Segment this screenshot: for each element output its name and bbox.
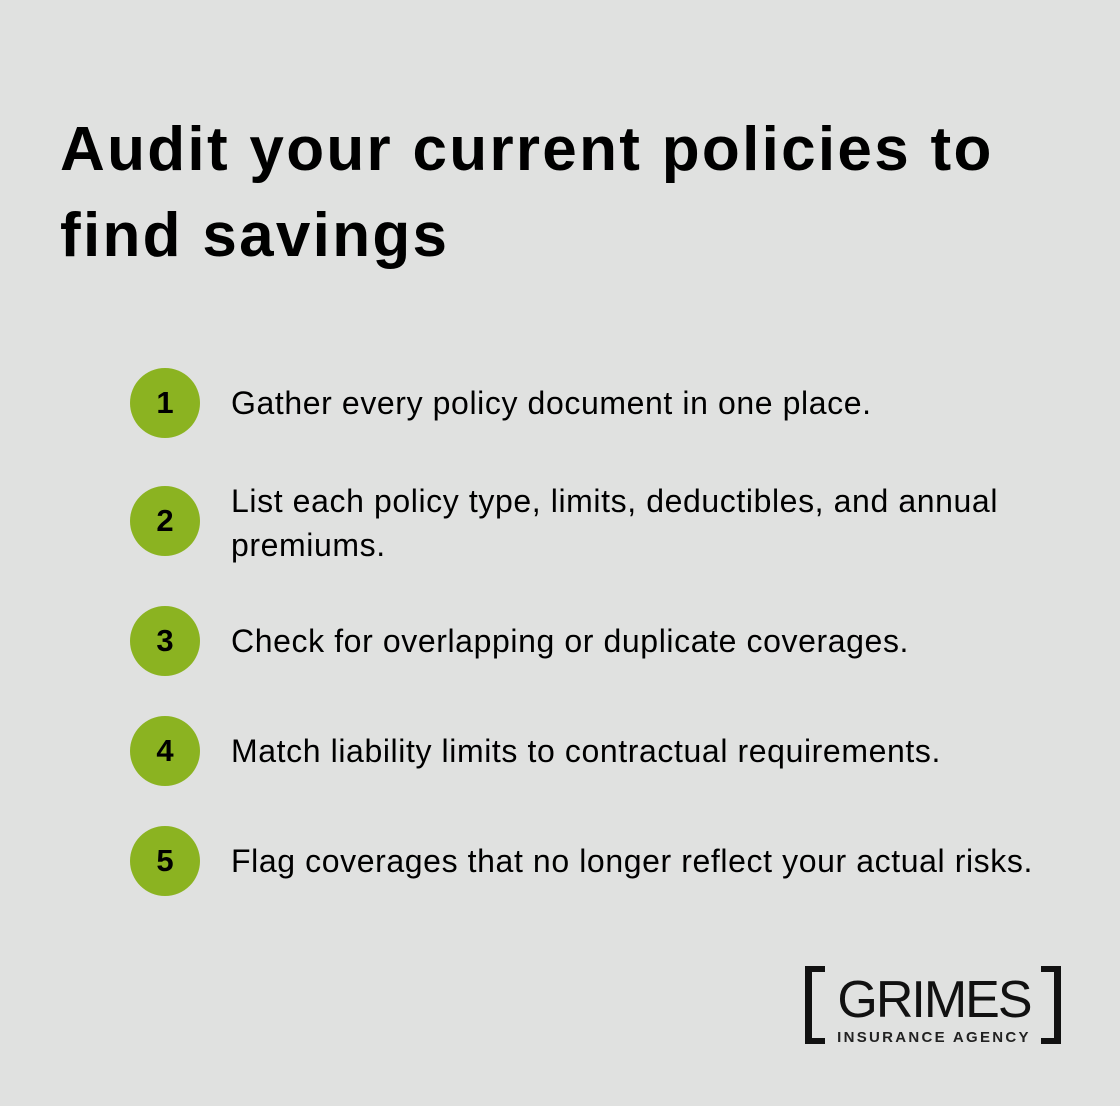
circle 5: 5 bbox=[156, 843, 174, 878]
circle 3 bbox=[130, 606, 200, 676]
text 5: Flag coverages that no longer reflect your actual risks. bbox=[231, 843, 1033, 879]
circle 5 bbox=[130, 826, 200, 896]
step 5 bbox=[130, 826, 1033, 896]
circle 4: 4 bbox=[156, 733, 174, 768]
circle 2: 2 bbox=[156, 503, 174, 538]
circle 1: 1 bbox=[156, 385, 174, 420]
text 4: Match liability limits to contractual requirements. bbox=[231, 733, 941, 769]
title bbox=[60, 115, 994, 270]
text 2: premiums. bbox=[231, 527, 386, 563]
logo: INSURANCE AGENCY bbox=[837, 1029, 1031, 1046]
logo bbox=[805, 966, 1061, 1046]
circle 3: 3 bbox=[156, 623, 174, 658]
step 1 bbox=[130, 368, 872, 438]
text 3: Check for overlapping or duplicate coverages. bbox=[231, 623, 909, 659]
title: Audit your current policies to bbox=[60, 115, 994, 184]
circle 2 bbox=[130, 486, 200, 556]
step 4 bbox=[130, 716, 941, 786]
circle 1 bbox=[130, 368, 200, 438]
title: find savings bbox=[60, 201, 449, 270]
text 1: Gather every policy document in one place. bbox=[231, 385, 872, 421]
text 2: List each policy type, limits, deductibles, and annual bbox=[231, 483, 998, 519]
text 2 bbox=[231, 483, 998, 563]
step 2 bbox=[130, 483, 998, 563]
logo: GRIMES bbox=[837, 971, 1031, 1029]
step 3 bbox=[130, 606, 909, 676]
circle 4 bbox=[130, 716, 200, 786]
